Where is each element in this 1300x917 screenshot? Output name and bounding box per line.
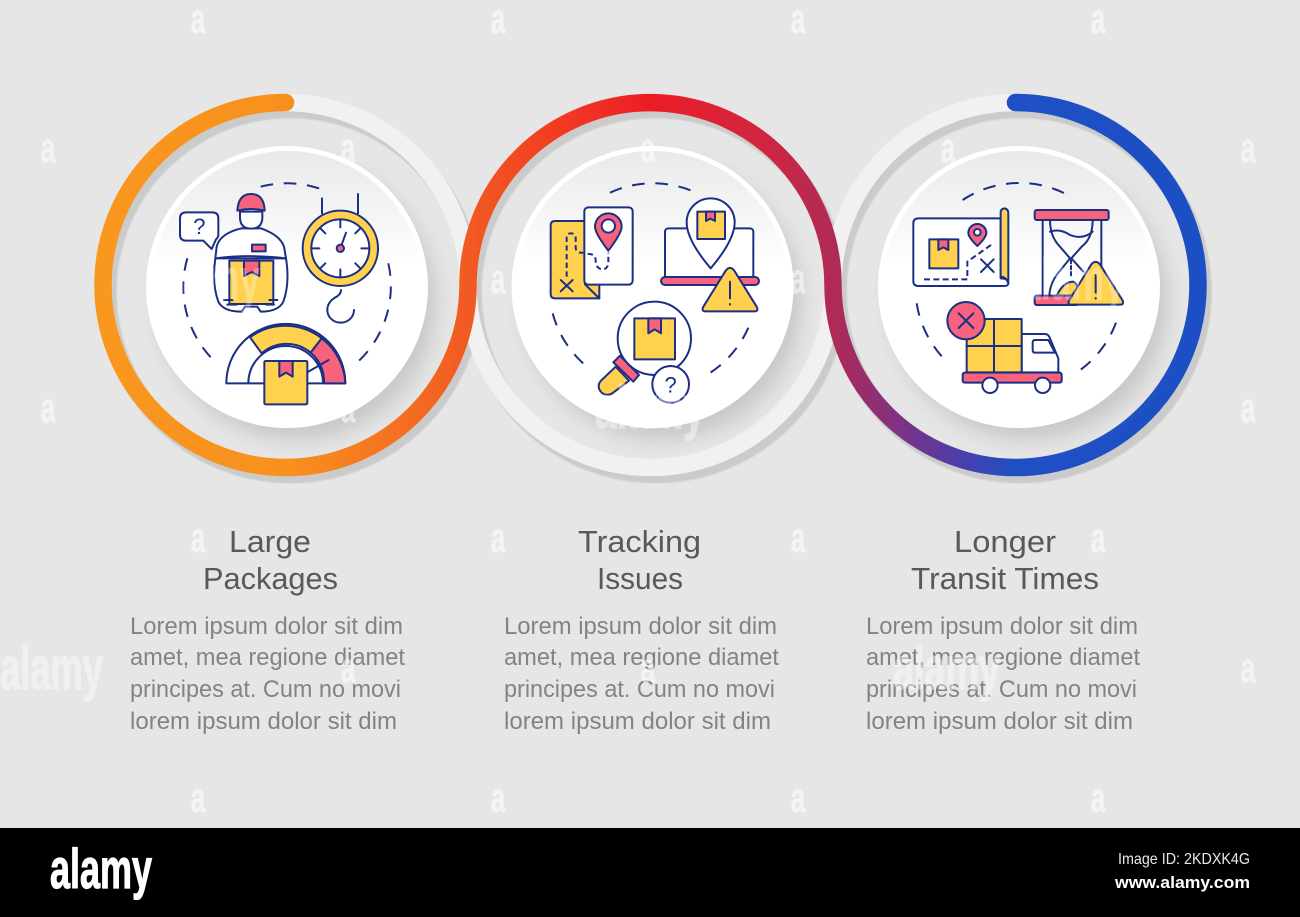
watermark marks: a: [791, 515, 806, 562]
text block: tracking issues: lorem ipsum dolor sit dim: [504, 708, 771, 735]
watermark marks: a: [1091, 515, 1106, 562]
watermark marks: a: [191, 775, 206, 822]
title: tracking issues: Tracking: [578, 524, 701, 559]
coloured flowing ribbon: [103, 102, 1198, 468]
text block: longer transit times: [866, 613, 1140, 735]
title: tracking issues: [578, 524, 701, 596]
website: www.alamy.com: [1114, 873, 1250, 892]
text block: large packages: lorem ipsum dolor sit dim: [130, 708, 397, 735]
icon: tracking issues: [551, 183, 759, 403]
icon: large packages: [180, 183, 391, 404]
text block: longer transit times: principes at. Cum no movi: [866, 676, 1137, 703]
icon: large packages: ?: [193, 214, 205, 239]
text block: large packages: Lorem ipsum dolor sit dim: [130, 613, 403, 640]
watermark words: alamy: [893, 635, 1000, 702]
watermark marks: a: [191, 515, 206, 562]
text block: tracking issues: principes at. Cum no movi: [504, 676, 775, 703]
title: longer transit times: Longer: [954, 524, 1056, 559]
faint watermark over icons: alamy: [155, 246, 260, 313]
watermark words: [0, 374, 1000, 702]
title: large packages: Large: [229, 524, 311, 559]
footer logo: alamy: [50, 837, 152, 900]
text block: large packages: amet, mea regione diamet: [130, 644, 405, 671]
watermark marks: a: [41, 125, 56, 172]
watermark marks: a: [641, 125, 656, 172]
title: longer transit times: [911, 524, 1099, 596]
watermark marks: a: [1241, 645, 1256, 692]
watermark words: alamy: [0, 635, 103, 702]
icon: tracking issues: ?: [665, 372, 677, 397]
watermark marks: a: [491, 515, 506, 562]
panel: tracking issues disc: [512, 146, 794, 428]
title: large packages: [203, 524, 338, 596]
watermark marks: a: [341, 125, 356, 172]
watermark marks: a: [641, 645, 656, 692]
watermark marks: a: [1091, 775, 1106, 822]
text block: large packages: [130, 613, 405, 735]
watermark marks: a: [791, 775, 806, 822]
faint watermark over icons: [155, 246, 1125, 313]
watermark marks: a: [341, 645, 356, 692]
text block: longer transit times: Lorem ipsum dolor sit dim: [866, 613, 1138, 640]
watermark marks: a: [341, 385, 356, 432]
text block: longer transit times: lorem ipsum dolor sit dim: [866, 708, 1133, 735]
watermark marks: a: [791, 256, 806, 303]
faint watermark over icons: alamy: [1020, 246, 1125, 313]
text block: longer transit times: amet, mea regione diamet: [866, 644, 1140, 671]
watermark marks: a: [491, 256, 506, 303]
text block: tracking issues: [504, 613, 779, 735]
title: tracking issues: Issues: [597, 561, 683, 596]
title: large packages: Packages: [203, 561, 338, 596]
light ring segments: [286, 102, 1016, 467]
disc shadows: [158, 162, 1168, 440]
title: longer transit times: Transit Times: [911, 561, 1099, 596]
text block: tracking issues: Lorem ipsum dolor sit dim: [504, 613, 777, 640]
watermark words: alamy: [595, 374, 705, 441]
footer bar: [0, 828, 1300, 917]
image id: Image ID: 2KDXK4G: [1118, 851, 1250, 868]
watermark marks: a: [1241, 125, 1256, 172]
panel: longer transit times disc: [878, 146, 1160, 428]
watermark marks: a: [41, 385, 56, 432]
text block: tracking issues: amet, mea regione diamet: [504, 644, 779, 671]
watermark marks: a: [1241, 385, 1256, 432]
text block: large packages: principes at. Cum no movi: [130, 676, 401, 703]
icon: longer transit times: [913, 183, 1123, 393]
watermark marks: a: [491, 775, 506, 822]
panel: large packages disc: [146, 146, 428, 428]
watermark marks: a: [941, 125, 956, 172]
ring shadows: [108, 110, 1203, 475]
